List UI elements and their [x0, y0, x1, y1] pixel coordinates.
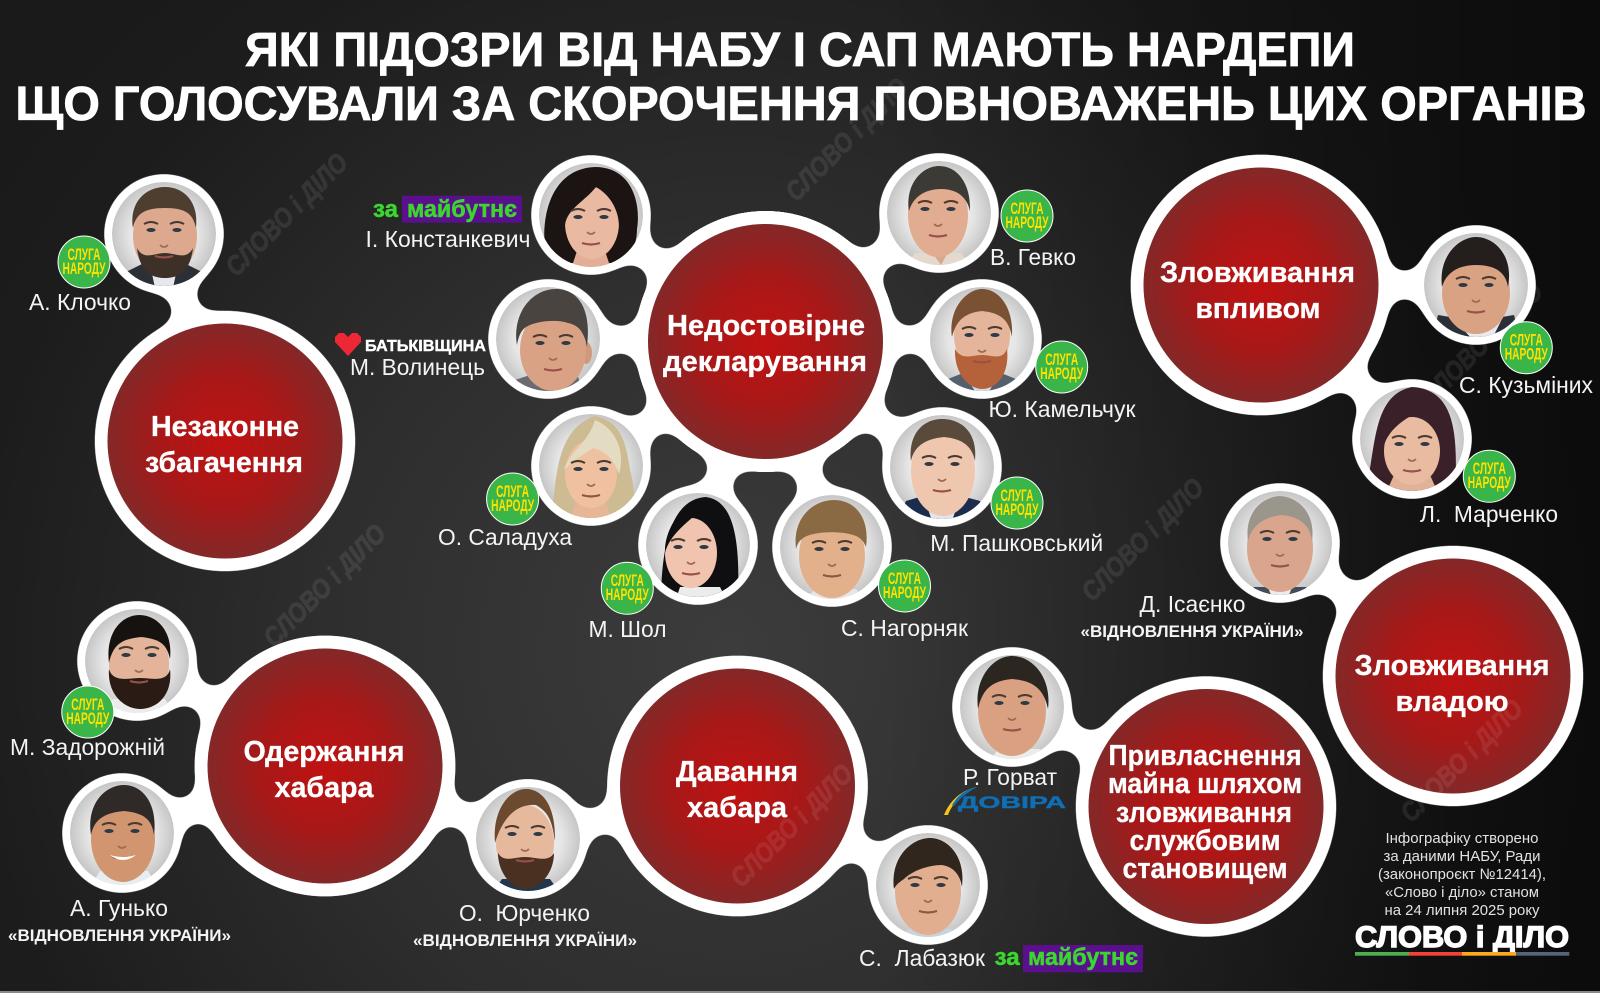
- panel: Зловживання впливом: впливом: [1196, 293, 1320, 325]
- portrait: Л. Марченко: [1360, 387, 1558, 527]
- portrait: Ю. Камельчук: [930, 287, 1136, 422]
- badge: Слуга народу: НАРОДУ: [1006, 214, 1049, 232]
- source credit: [1378, 830, 1546, 919]
- badge: Слуга народу: [58, 236, 110, 288]
- name: М. Задорожній: [10, 734, 165, 760]
- name: А. Клочко: [29, 289, 131, 315]
- watermarks over red circles: [724, 693, 1529, 893]
- badge: Слуга народу: СЛУГА: [1000, 487, 1034, 505]
- name: М. Пашковський: [930, 530, 1103, 556]
- name: В. Гевко: [990, 244, 1076, 270]
- name: О. Саладуха: [438, 524, 572, 550]
- name and party: [1080, 591, 1304, 641]
- panel: Одержання хабара: Одержання: [244, 736, 404, 768]
- badge: Слуга народу: СЛУГА: [68, 246, 101, 264]
- panel: Давання хабара: [620, 668, 855, 904]
- badge: Слуга народу: НАРОДУ: [491, 497, 535, 515]
- name and party: «ВІДНОВЛЕННЯ УКРАЇНИ»: [413, 932, 637, 950]
- panel: Недостовірне декларування: [648, 224, 883, 459]
- watermarks over red circles: СЛОВО і ДІЛО: [1394, 693, 1529, 828]
- portrait: І. Констанкевич: [366, 163, 643, 269]
- panel: Недостовірне декларування: Недостовірне: [667, 310, 865, 342]
- name and party: А. Гунько: [70, 895, 168, 921]
- badge: Слуга народу: СЛУГА: [611, 572, 644, 590]
- badge: Слуга народу: НАРОДУ: [1505, 346, 1548, 364]
- party logo: Довіра: ДОВІРА: [958, 793, 1066, 812]
- name and party: [413, 900, 637, 950]
- panel: Зловживання впливом: [1144, 168, 1378, 402]
- badge: Слуга народу: НАРОДУ: [66, 710, 110, 728]
- portrait: С. Нагорняк: [780, 495, 969, 641]
- portrait: М. Пашковський: [890, 415, 1103, 556]
- badge: Слуга народу: НАРОДУ: [606, 586, 649, 604]
- portrait: М. Шол: [588, 493, 750, 642]
- badge: Слуга народу: [1500, 322, 1552, 374]
- badge: Слуга народу: [62, 686, 114, 738]
- portrait: С. Лабазюк: [859, 833, 1143, 972]
- badge: Слуга народу: НАРОДУ: [62, 260, 106, 278]
- portrait: В. Гевко: [887, 161, 1076, 270]
- name: М. Волинець: [350, 354, 485, 380]
- panel: Привласнення майна: Привласнення: [1108, 740, 1302, 772]
- panel: Давання хабара: Давання: [676, 756, 798, 788]
- badge: Слуга народу: [991, 477, 1043, 529]
- badge: Слуга народу: [1036, 341, 1088, 393]
- panel: Одержання хабара: [208, 648, 442, 884]
- panel: Зловживання владою: Зловживання: [1354, 650, 1550, 682]
- party logo: за майбутнє: майбутнє: [1028, 944, 1138, 971]
- party logo: за майбутнє: за: [995, 944, 1020, 971]
- badge: Слуга народу: [601, 562, 653, 614]
- source credit: Інфографіку створено: [1386, 830, 1538, 847]
- name: С. Лабазюк: [859, 945, 986, 971]
- party logo: за майбутнє: майбутнє: [407, 196, 517, 223]
- panel: Привласнення майна: зловживання: [1116, 797, 1292, 829]
- panel: Зловживання владою: владою: [1396, 686, 1508, 718]
- panel: Привласнення майна: [1088, 689, 1324, 924]
- portrait: С. Кузьміних: [1424, 233, 1593, 398]
- panel: Зловживання владою: [1336, 558, 1570, 794]
- badge: Слуга народу: СЛУГА: [71, 696, 104, 714]
- panel: Одержання хабара: хабара: [274, 772, 375, 804]
- badge: Слуга народу: НАРОДУ: [1468, 474, 1511, 492]
- name: С. Нагорняк: [841, 615, 969, 641]
- watermarks: СЛОВО і ДІЛО: [257, 518, 392, 653]
- panel: Незаконне збагачення: збагачення: [145, 447, 303, 479]
- badge: Слуга народу: [1463, 450, 1515, 502]
- name and party: «ВІДНОВЛЕННЯ УКРАЇНИ»: [1080, 623, 1304, 641]
- name: Ю. Камельчук: [988, 396, 1136, 422]
- watermarks: СЛОВО і ДІЛО: [1075, 472, 1210, 607]
- panel: Зловживання впливом: Зловживання: [1160, 257, 1355, 289]
- portrait: А. Гунько: [8, 781, 231, 945]
- badge: Слуга народу: СЛУГА: [1010, 200, 1044, 218]
- title: ЯКІ ПІДОЗРИ ВІД НАБУ І САП МАЮТЬ НАРДЕПИ: [245, 24, 1355, 77]
- badge: Слуга народу: СЛУГА: [888, 570, 921, 588]
- source credit: на 24 липня 2025 року: [1384, 902, 1540, 919]
- panel: Незаконне збагачення: Незаконне: [151, 411, 299, 443]
- source credit: «Слово і діло» станом: [1385, 884, 1539, 901]
- panel: Привласнення майна: становищем: [1122, 853, 1288, 885]
- badge: Слуга народу: [487, 473, 539, 525]
- name: Р. Горват: [963, 764, 1057, 790]
- title: ЩО ГОЛОСУВАЛИ ЗА СКОРОЧЕННЯ ПОВНОВАЖЕНЬ ЦИХ ОРГАНІВ: [16, 78, 1586, 131]
- panel: Давання хабара: хабара: [687, 792, 788, 824]
- watermarks: СЛОВО і ДІЛО: [1414, 276, 1549, 411]
- portrait: Р. Горват: [944, 655, 1066, 815]
- portrait: О. Юрченко: [413, 787, 637, 950]
- party logo: Батьківщина: БАТЬКІВЩИНА: [365, 338, 486, 355]
- badge: Слуга народу: НАРОДУ: [1040, 365, 1084, 383]
- name and party: «ВІДНОВЛЕННЯ УКРАЇНИ»: [8, 927, 231, 945]
- party logo: за майбутнє: за: [373, 196, 399, 223]
- badge: Слуга народу: СЛУГА: [496, 483, 529, 501]
- name: І. Констанкевич: [366, 226, 530, 252]
- logo: Слово і діло: СЛОВО і ДІЛО: [1355, 921, 1569, 954]
- watermarks: СЛОВО і ДІЛО: [219, 147, 354, 282]
- portrait: Д. Ісаєнко: [1080, 491, 1332, 641]
- name and party: Д. Ісаєнко: [1140, 591, 1246, 617]
- name: Л. Марченко: [1420, 501, 1558, 527]
- panel: Незаконне збагачення: [108, 324, 342, 558]
- source credit: за даними НАБУ, Ради: [1384, 848, 1540, 865]
- panel: Привласнення майна: службовим: [1130, 825, 1280, 857]
- badge: Слуга народу: СЛУГА: [1473, 460, 1506, 478]
- name and party: [8, 895, 231, 945]
- badge: Слуга народу: [878, 560, 930, 612]
- panel: Недостовірне декларування: декларування: [663, 346, 867, 378]
- portrait: М. Волинець: [335, 287, 600, 393]
- connector network: [61, 152, 1584, 946]
- watermarks: [219, 72, 1549, 653]
- party logo: Батьківщина: [335, 333, 486, 356]
- name: М. Шол: [588, 616, 666, 642]
- source credit: (законопроєкт №12414),: [1378, 866, 1546, 883]
- badge: Слуга народу: СЛУГА: [1045, 351, 1078, 369]
- badge: Слуга народу: НАРОДУ: [883, 584, 926, 602]
- watermarks: СЛОВО і ДІЛО: [779, 72, 914, 207]
- party logo: Довіра: [944, 787, 1066, 815]
- portrait: А. Клочко: [29, 182, 216, 315]
- badge: Слуга народу: [1001, 190, 1053, 242]
- name and party: О. Юрченко: [459, 900, 590, 926]
- name: С. Кузьміних: [1459, 372, 1593, 398]
- portrait: М. Задорожній: [10, 609, 189, 760]
- badge: Слуга народу: НАРОДУ: [996, 501, 1039, 519]
- portrait: О. Саладуха: [438, 414, 643, 550]
- watermarks over red circles: СЛОВО і ДІЛО: [724, 758, 859, 893]
- panel: Привласнення майна: майна шляхом: [1108, 768, 1302, 800]
- title: [16, 24, 1586, 131]
- badge: Слуга народу: СЛУГА: [1510, 332, 1543, 350]
